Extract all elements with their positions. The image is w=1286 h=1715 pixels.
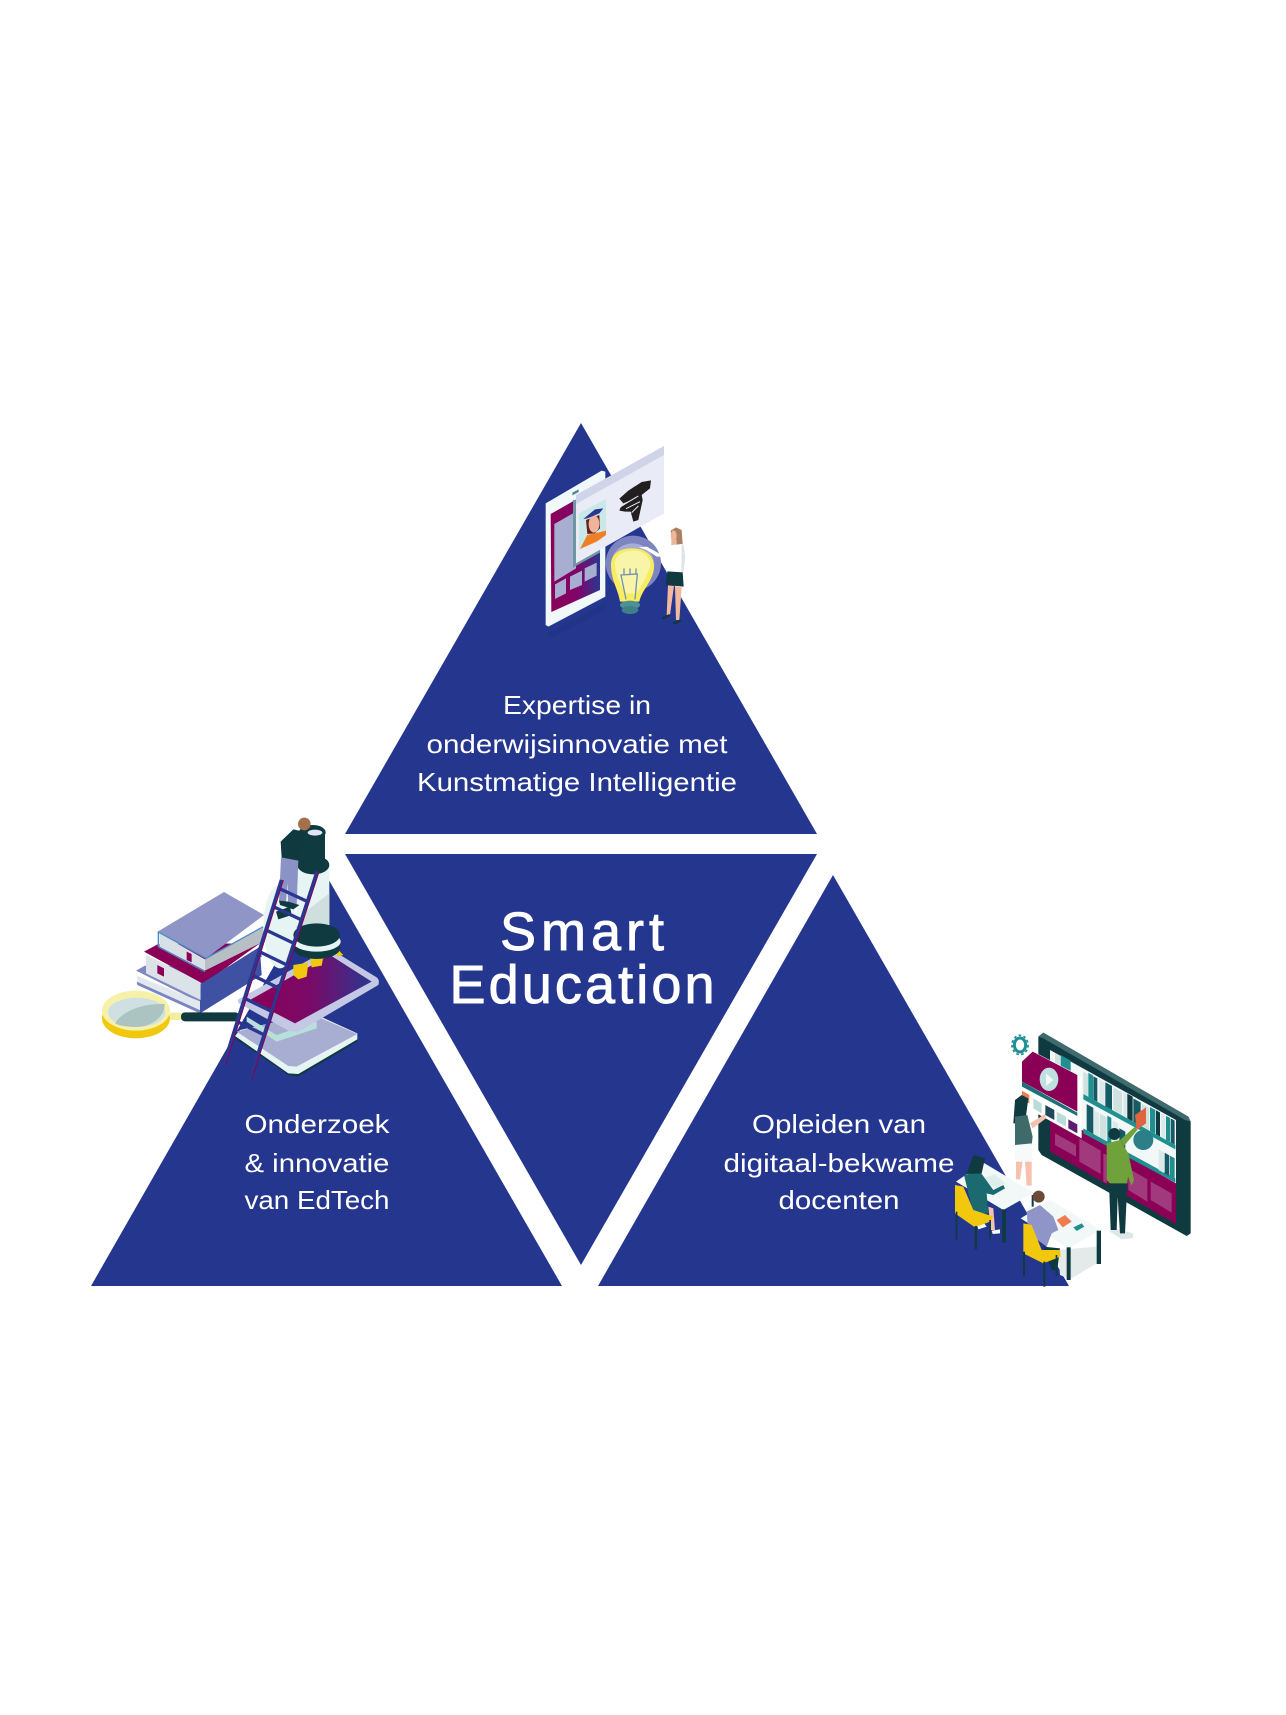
text block: left panel: [244, 1109, 391, 1215]
icon: tablet, light bulb and woman: [546, 446, 685, 638]
text block: left panel: Onderzoek: [244, 1109, 391, 1139]
central title: [450, 902, 714, 1015]
text block: right panel: Opleiden van: [752, 1109, 926, 1139]
text block: right panel: docenten: [778, 1185, 900, 1215]
triangle: right panel: [598, 875, 1069, 1286]
central title: Smart: [500, 902, 664, 962]
text block: top panel: Kunstmatige Intelligentie: [417, 767, 737, 797]
text block: right panel: digitaal-bekwame: [724, 1148, 954, 1178]
text block: top panel: onderwijsinnovatie met: [426, 729, 728, 759]
text block: right panel: [724, 1109, 954, 1215]
text block: top panel: [417, 690, 737, 797]
central title: Education: [450, 955, 714, 1015]
triangle: left panel: [91, 875, 562, 1286]
icon: digital bookshelf screen, classroom desks and people: [955, 1033, 1191, 1287]
text block: top panel: Expertise in: [503, 690, 651, 720]
triangle: top panel: [345, 423, 817, 834]
icon: microscope, ladder, books and magnifier: [102, 818, 379, 1079]
triangle: centre panel: [345, 854, 817, 1265]
text block: left panel: & innovatie: [244, 1148, 390, 1178]
text block: left panel: van EdTech: [244, 1185, 390, 1215]
